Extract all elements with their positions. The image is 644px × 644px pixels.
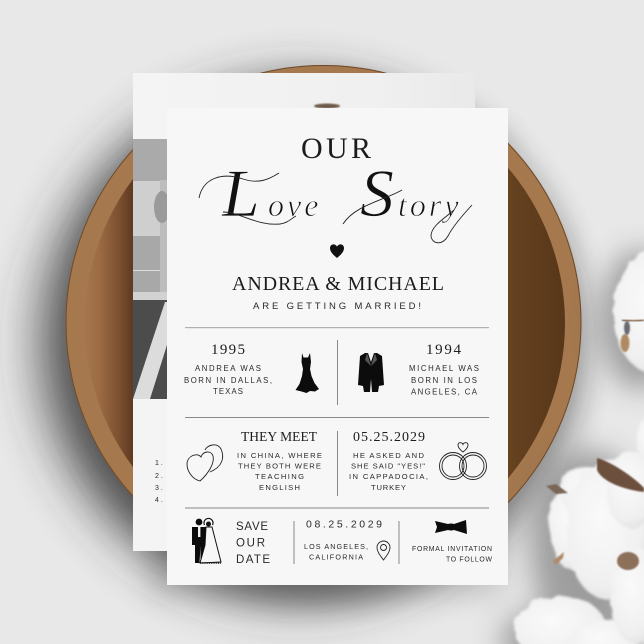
cotton shadow [500,250,644,644]
save our date: OUR [236,538,265,550]
they meet text: IN CHINA, WHERE [237,451,322,460]
location [304,542,368,562]
cotton top right [613,250,644,374]
year 1994: 1994 [426,342,462,358]
cotton main [546,452,644,643]
script title: love story: S [360,155,394,231]
icon: two hearts [187,445,223,481]
proposal text [349,451,428,492]
they meet text: ENGLISH [259,483,300,492]
icon: heart [330,244,344,258]
michael text [409,364,479,396]
icon: bride and groom [192,518,221,563]
proposal text: HE ASKED AND [353,451,425,460]
dividers [185,327,489,564]
icon: dress [296,353,319,393]
script title: love story [199,155,472,243]
invitation note: FORMAL INVITATION [412,546,492,553]
back card [133,73,475,551]
they meet text: THEY BOTH WERE [238,462,321,470]
title [199,132,472,258]
wooden plate [66,65,582,581]
panel: michael born [358,342,479,396]
script title: love story: L [221,155,260,231]
card shadow [150,130,505,596]
date heading: 05.25.2029 [353,430,425,445]
names heading: ANDREA & MICHAEL [232,273,444,295]
front card [167,108,508,585]
michael text: ANGELES, CA [411,388,478,396]
andrea text: BORN IN DALLAS, [184,376,272,385]
wedding date: 08.25.2029 [306,518,382,530]
proposal text: IN CAPPADOCIA, [349,472,428,481]
invitation note [412,546,492,564]
icon: bow tie [435,520,467,534]
proposal text: TURKEY [371,483,406,492]
back card numbered list: 3 . [155,485,163,492]
michael text: MICHAEL WAS [409,364,479,373]
back card numbered list [155,460,163,504]
script title: love story: ove [268,187,321,223]
back card peek of hair [314,104,340,108]
save our date: SAVE [236,521,268,533]
icon: tuxedo [358,353,384,392]
panel: save the date [192,518,492,566]
icon: map pin [377,541,390,560]
back card numbered list: 2 . [155,473,163,480]
andrea text [184,364,272,396]
they meet heading: THEY MEET [241,429,318,444]
cotton bottom [514,596,640,644]
location: LOS ANGELES, [304,542,368,551]
icon: rings [440,443,486,480]
panel: andrea born [184,342,319,396]
subheading: ARE GETTING MARRIED! [253,301,421,312]
location: CALIFORNIA [309,552,363,562]
back card photo [133,139,170,399]
andrea text: TEXAS [213,387,243,396]
cotton bolls [514,250,644,644]
cotton right edge [637,414,644,466]
script title: love story: tory [398,187,462,223]
proposal text: SHE SAID "YES!" [351,462,425,470]
panel: they meet [187,429,322,492]
andrea text: ANDREA WAS [195,364,261,373]
back card numbered list: 1 . [155,460,163,467]
they meet text: TEACHING [255,472,304,481]
year 1995: 1995 [211,342,245,358]
back card numbered list: 4 . [155,497,163,504]
invitation note: TO FOLLOW [446,556,492,564]
they meet text [237,451,322,492]
michael text: BORN IN LOS [411,376,477,385]
save our date: DATE [236,554,270,566]
plate shadow [40,78,588,602]
heading: our: OUR [301,132,371,165]
panel: proposal [349,430,486,492]
save our date [236,521,270,566]
